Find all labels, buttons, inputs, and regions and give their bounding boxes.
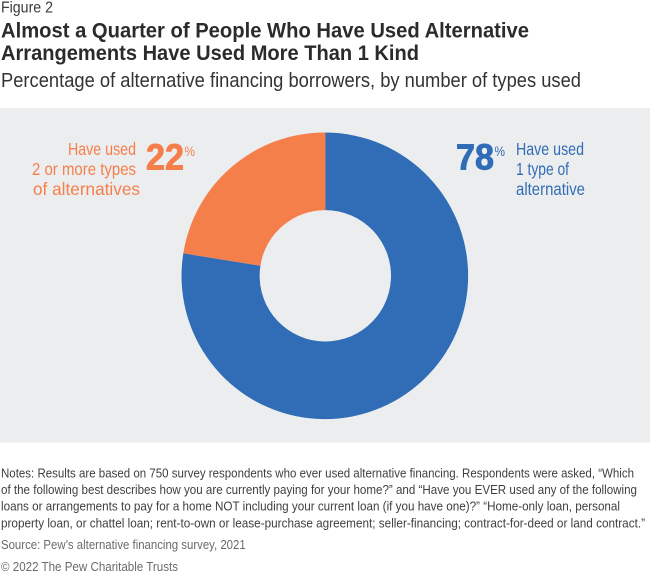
label: 22 percent: 22 (146, 136, 184, 177)
label: 22 percent: Have used (68, 139, 136, 159)
label: 22 percent: % (184, 143, 195, 159)
segment: 78% one type (182, 132, 468, 419)
label: 78 percent: alternative (516, 179, 585, 199)
label: 78 percent: Have used (516, 139, 584, 159)
title (1, 19, 529, 65)
title: Almost a Quarter of People Who Have Used Alternative (1, 19, 529, 43)
label: 78 percent (456, 136, 585, 199)
notes (1, 465, 645, 530)
chart panel background (0, 108, 650, 443)
label: 78 percent: % (494, 143, 505, 159)
label: 22 percent (32, 136, 195, 199)
segment: 22% two or more types (183, 132, 326, 266)
subtitle: Percentage of alternative financing borrowers, by number of types used (1, 70, 581, 92)
donut chart (182, 132, 468, 419)
label: 78 percent: 78 (456, 136, 494, 177)
label: 22 percent: of alternatives (33, 179, 140, 199)
title: Arrangements Have Used More Than 1 Kind (1, 41, 419, 65)
label: 22 percent: 2 or more types (32, 159, 136, 179)
source: Source: Pew’s alternative financing survey, 2021 (1, 537, 246, 552)
label: 78 percent: 1 type of (516, 159, 569, 179)
figure label: Figure 2 (1, 0, 53, 17)
